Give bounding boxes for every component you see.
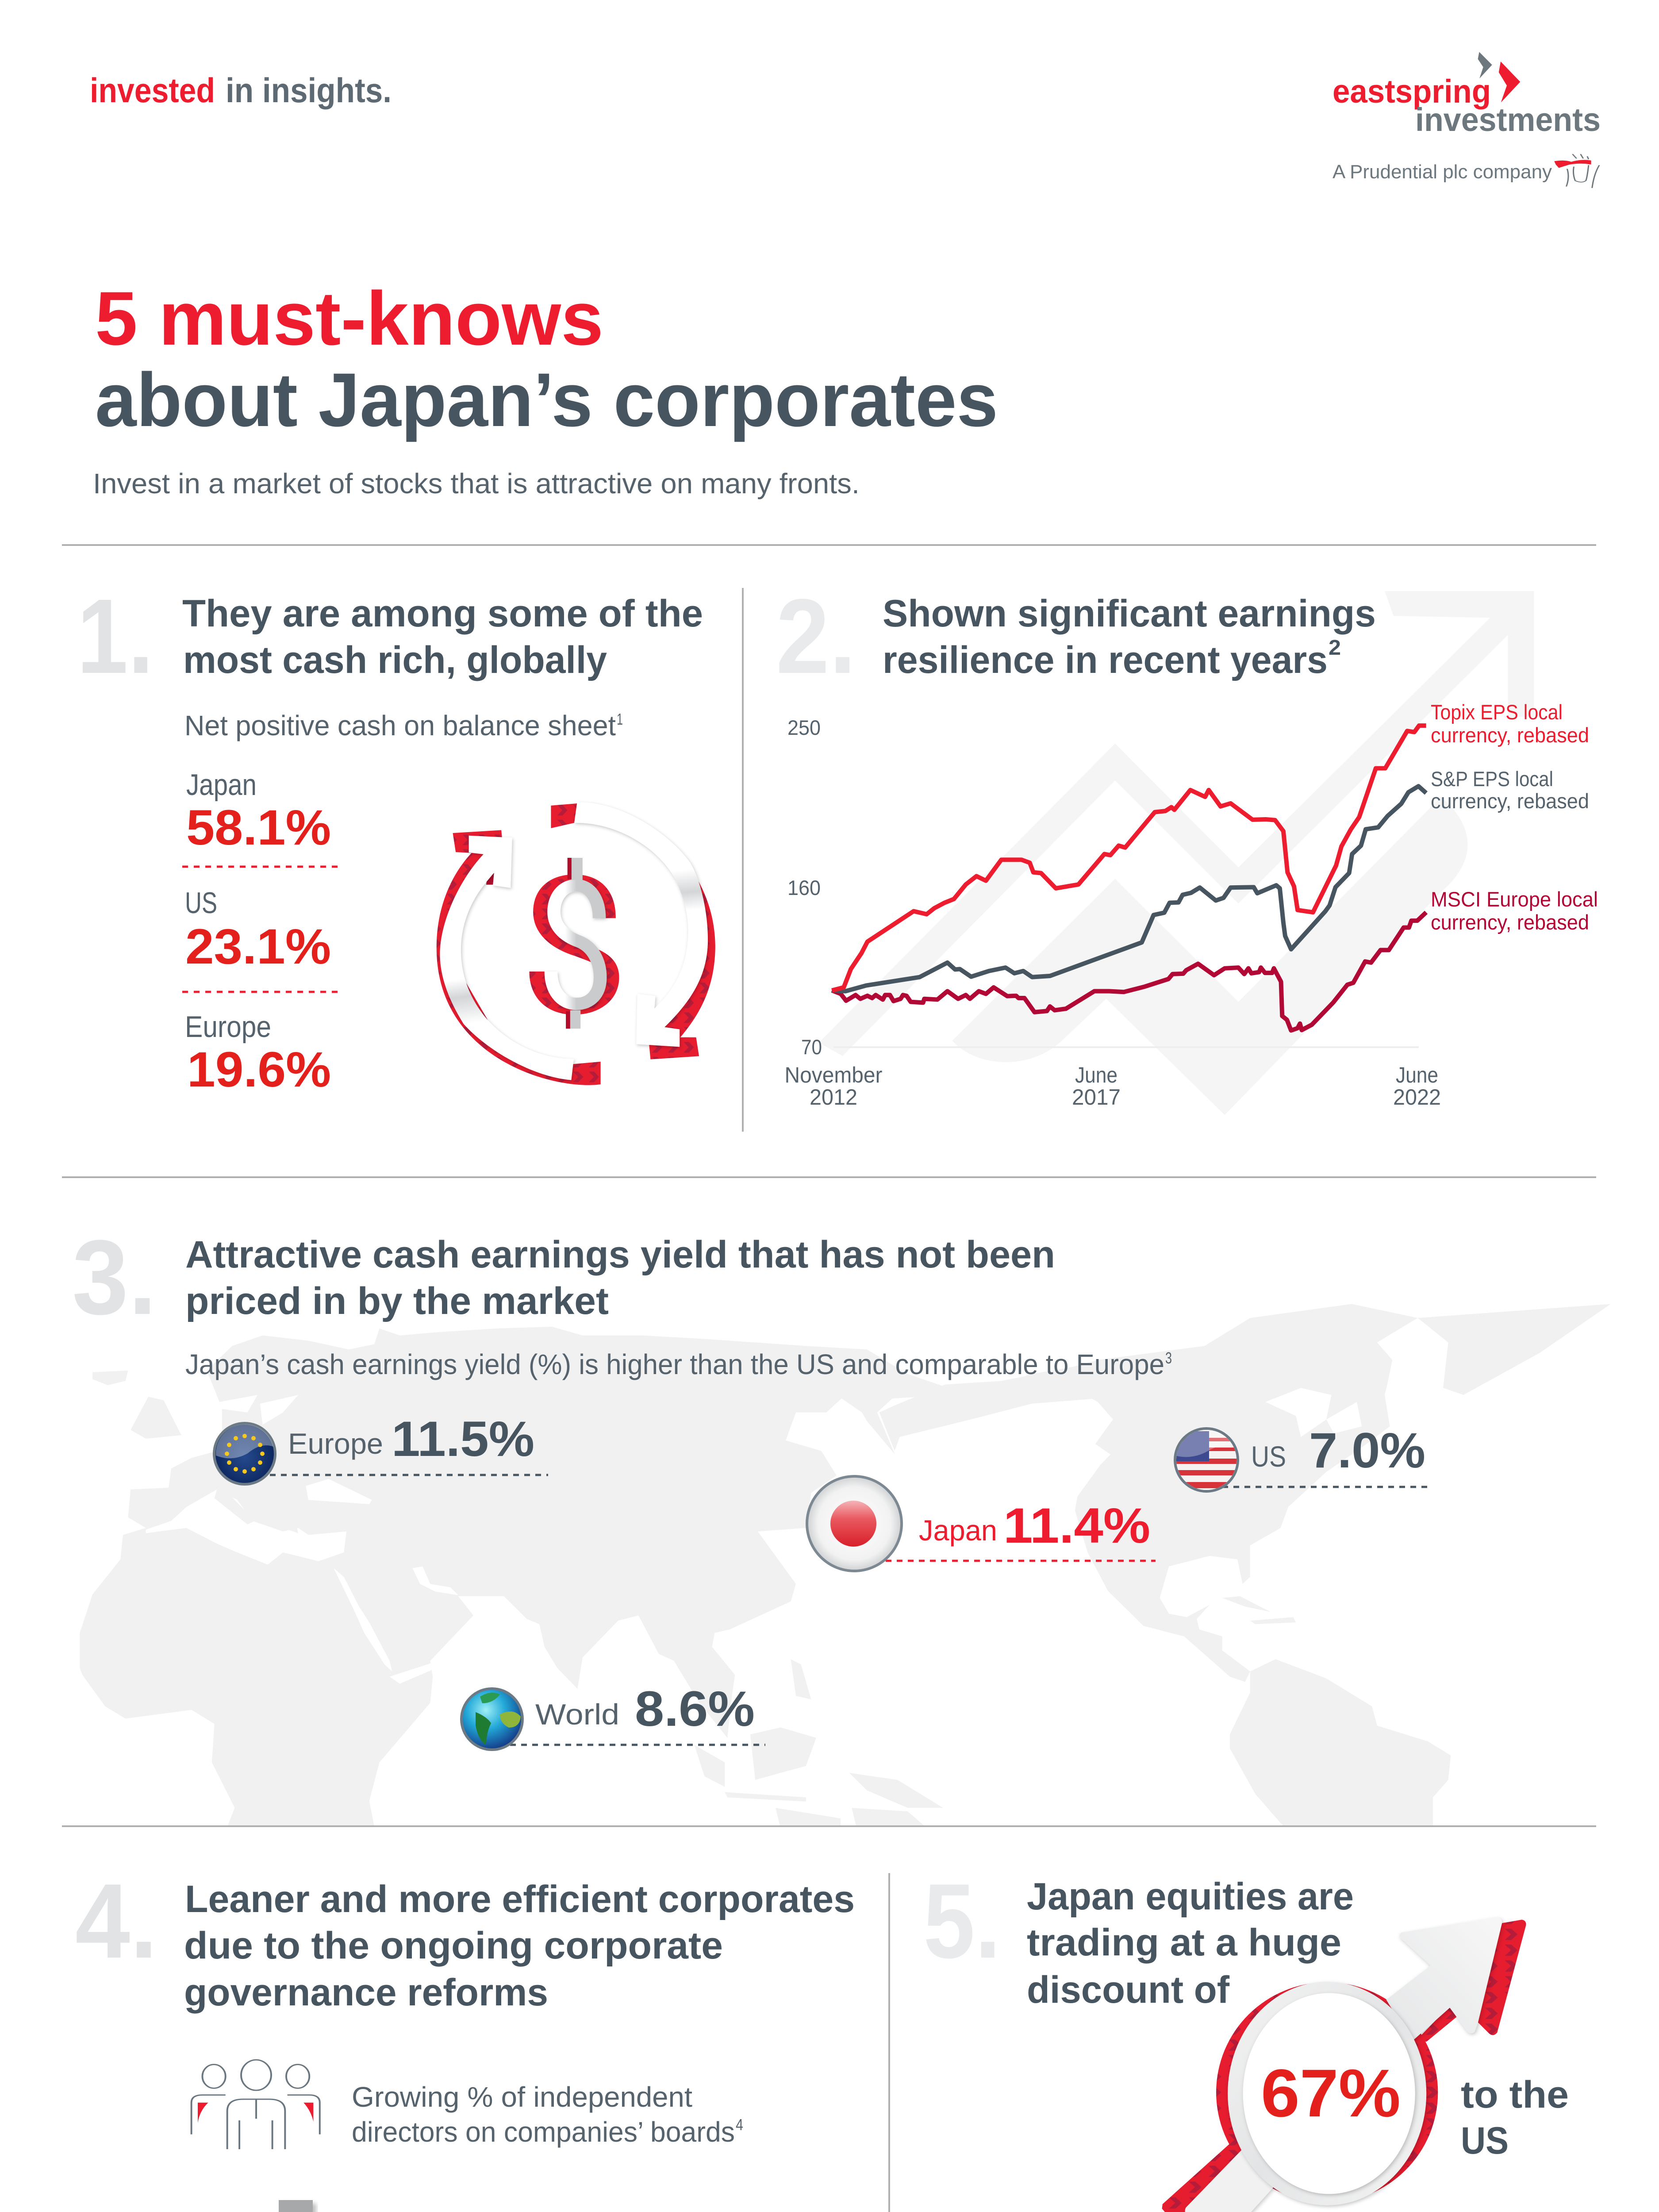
- bar 2014: [191, 2200, 461, 2212]
- callout: Europe: 11.5%: [392, 1411, 534, 1467]
- series label: MSCI Europe: currency, rebased: [1431, 910, 1589, 934]
- panel 4: corporate governance: [75, 1862, 855, 2212]
- tagline: invested in insights: [90, 71, 392, 110]
- panel 5: valuation discount: [923, 1862, 1578, 2212]
- series label: Topix: Topix EPS local: [1431, 700, 1563, 724]
- stat: Japan: 58.1%: [186, 800, 331, 855]
- series lines: [832, 726, 1426, 1030]
- panel 1: cash rich: [77, 577, 715, 1097]
- callout: Japan: [807, 1476, 1156, 1571]
- callout: 67%: 67%: [1261, 2055, 1401, 2131]
- title: about Japan’s corporates: [95, 357, 998, 442]
- series label: Topix: [1431, 700, 1589, 747]
- heading 1: They are among some of the: [182, 592, 703, 635]
- world map background: [80, 1304, 1611, 1829]
- heading 2: [883, 592, 1376, 681]
- series label: S&P: [1431, 767, 1589, 813]
- stat: Europe: [185, 1010, 331, 1097]
- icon: logo chevrons: [1478, 52, 1520, 103]
- text: to the US: [1461, 2074, 1569, 2162]
- subheading 4: [352, 2081, 743, 2148]
- callout: World: World: [535, 1698, 619, 1731]
- stat: Europe: 19.6%: [187, 1042, 331, 1097]
- number 4: 4.: [75, 1862, 157, 1980]
- title: 5 must-knows: [95, 276, 603, 361]
- stat: Japan: Japan: [186, 768, 257, 802]
- watermark arrow: [819, 591, 1534, 1115]
- icon: circular arrows with dollar sign: [437, 802, 715, 1085]
- subheading 1: 1: [617, 710, 623, 728]
- x axis labels: 2012: [810, 1085, 857, 1110]
- callout: US: US: [1251, 1440, 1286, 1473]
- series label: Topix: currency, rebased: [1431, 723, 1589, 747]
- subtitle: Invest in a market of stocks that is attractive on many fronts.: [93, 468, 860, 499]
- logo: Eastspring Investments: eastspring: [1333, 73, 1491, 110]
- heading 4: Leaner and more efficient corporates: [185, 1878, 855, 1920]
- subheading 3: 3: [1165, 1349, 1172, 1367]
- subheading 4: Growing % of independent: [352, 2081, 692, 2113]
- series label: S&P: currency, rebased: [1431, 789, 1589, 813]
- subheading 4: directors on companies’ boards: [352, 2116, 735, 2148]
- callout: World: 8.6%: [635, 1681, 755, 1736]
- heading 1: [182, 592, 703, 681]
- logo: Eastspring Investments: investments: [1415, 101, 1601, 138]
- number 5: 5.: [923, 1862, 1001, 1980]
- logo: Eastspring Investments: [1333, 52, 1601, 188]
- x axis labels: November: [785, 1063, 882, 1087]
- callout: Japan: 11.4%: [1003, 1498, 1150, 1553]
- stat: US: US: [185, 886, 217, 920]
- callout: US: [1175, 1423, 1429, 1493]
- heading 4: due to the ongoing corporate: [184, 1924, 723, 1967]
- stat: US: [185, 886, 331, 974]
- line chart: [785, 700, 1598, 1110]
- stat: Europe: Europe: [185, 1010, 271, 1044]
- stat: Japan: [186, 768, 331, 855]
- number 3: 3.: [72, 1218, 157, 1336]
- heading 2: Shown significant earnings: [883, 592, 1376, 635]
- heading 1: most cash rich, globally: [183, 639, 607, 681]
- series label: MSCI Europe: MSCI Europe local: [1431, 887, 1598, 911]
- x axis labels: June: [1396, 1063, 1438, 1087]
- callout: Japan: Japan: [919, 1514, 997, 1547]
- icon: globe: [461, 1689, 522, 1750]
- bar chart: [191, 2200, 855, 2212]
- series label: S&P: S&P EPS local: [1431, 767, 1553, 791]
- heading 3: Attractive cash earnings yield that has not been: [185, 1233, 1055, 1276]
- panel 3: cash earnings yield map: [72, 1218, 1611, 1829]
- tagline: invested in insights: invested: [90, 71, 215, 110]
- icon: three directors: [192, 2060, 320, 2149]
- text: to the US: US: [1461, 2120, 1509, 2162]
- series label: MSCI Europe: [1431, 887, 1598, 934]
- text: to the US: to the: [1461, 2074, 1569, 2116]
- x axis labels: [785, 1063, 1441, 1110]
- subheading 4: 4: [736, 2116, 743, 2134]
- number 1: 1.: [77, 577, 154, 695]
- heading 3: priced in by the market: [185, 1280, 609, 1322]
- y axis labels: 250: [787, 716, 821, 739]
- icon: US flag: [1175, 1429, 1239, 1493]
- icon: EU flag: [214, 1423, 275, 1484]
- number 2: 2.: [776, 577, 856, 695]
- stat: US: 23.1%: [185, 919, 331, 974]
- heading 5: Japan equities are: [1027, 1875, 1354, 1918]
- title: [95, 276, 998, 442]
- heading 5: [1027, 1875, 1354, 2011]
- icon: Prudence head: [1555, 154, 1599, 188]
- y axis labels: 70: [801, 1035, 822, 1059]
- logo: Eastspring Investments: A Prudential plc company: [1333, 161, 1552, 183]
- x axis labels: 2017: [1072, 1085, 1121, 1110]
- callout: Europe: Europe: [288, 1427, 383, 1460]
- subheading 1: Net positive cash on balance sheet: [184, 710, 616, 741]
- y axis labels: [787, 716, 822, 1059]
- tagline: invested in insights: in insights.: [226, 71, 392, 110]
- subheading 3: Japan’s cash earnings yield (%) is higher than the US and comparable to Europe: [185, 1348, 1164, 1380]
- heading 5: trading at a huge: [1027, 1921, 1341, 1964]
- heading 3: [185, 1233, 1055, 1322]
- heading 2: 2: [1329, 636, 1341, 660]
- icon: Japan flag: [807, 1476, 902, 1571]
- x axis labels: June: [1075, 1063, 1118, 1087]
- heading 5: discount of: [1027, 1969, 1229, 2011]
- heading 2: resilience in recent years: [883, 639, 1328, 681]
- icon: arrow with magnifier ring: [1162, 1917, 1526, 2212]
- y axis labels: 160: [787, 876, 821, 899]
- panel 2: earnings resilience: [776, 577, 1598, 1115]
- x axis labels: 2022: [1393, 1085, 1441, 1110]
- callout: US: 7.0%: [1309, 1423, 1425, 1478]
- heading 4: [184, 1878, 855, 2014]
- heading 4: governance reforms: [184, 1971, 548, 2014]
- callout: Europe: [214, 1411, 548, 1484]
- callout: World: [461, 1681, 765, 1750]
